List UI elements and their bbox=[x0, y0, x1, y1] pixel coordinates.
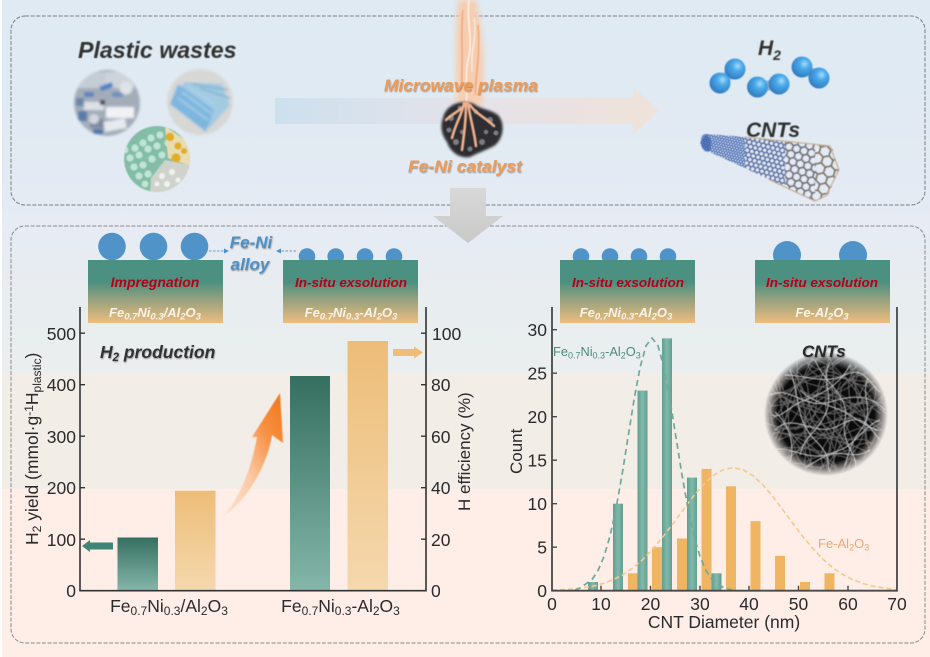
diagram: impregnation catalyst: /Al bbox=[163, 305, 181, 320]
left axis numbers: 300 bbox=[47, 427, 76, 447]
category label 2: 3 bbox=[393, 604, 400, 618]
category label 1: 3 bbox=[221, 604, 228, 618]
x axis numbers: 50 bbox=[789, 594, 808, 614]
y axis numbers: 10 bbox=[528, 494, 547, 514]
legend: Fe-Al2O3: Fe-Al bbox=[818, 536, 849, 551]
diagram: in-situ exsolution catalyst, left chart: -Al bbox=[359, 305, 377, 320]
right axis numbers: 40 bbox=[431, 478, 451, 498]
diagram: impregnation catalyst: 2 bbox=[179, 312, 186, 322]
arrow: left axis indicator bbox=[82, 540, 113, 552]
diagram: in-situ exsolution catalyst, left chart: 2 bbox=[376, 312, 383, 322]
left axis title: ) bbox=[22, 353, 42, 358]
icon: catalyst rock bbox=[441, 102, 503, 157]
legend: Fe0.7Ni0.3-Al2O3: 2 bbox=[621, 350, 626, 360]
green fit curve bbox=[575, 338, 732, 590]
label: Fe-Ni alloy: alloy bbox=[231, 255, 271, 274]
diagram: impregnation catalyst bbox=[88, 233, 223, 323]
left axis title: -1 bbox=[22, 405, 36, 416]
diagram: in-situ exsolution catalyst, right chart bbox=[560, 248, 695, 323]
arrow: improvement bbox=[220, 393, 283, 518]
diagram: in-situ exsolution catalyst, left chart: O bbox=[382, 305, 392, 320]
diagram: in-situ exsolution catalyst, left chart: 3 bbox=[392, 312, 398, 322]
legend: Fe0.7Ni0.3-Al2O3: 0.7 bbox=[568, 350, 580, 360]
right axis numbers: 20 bbox=[431, 530, 451, 550]
left axis title: H bbox=[22, 392, 42, 405]
icon: plastic bottles photo bbox=[74, 70, 140, 136]
diagram: in-situ exsolution catalyst, right chart: -Al bbox=[634, 305, 652, 320]
green bars bbox=[588, 338, 722, 591]
left axis numbers: 500 bbox=[47, 324, 76, 344]
legend: Fe-Al2O3: 2 bbox=[849, 542, 854, 552]
y axis numbers: 5 bbox=[537, 538, 547, 558]
category label 1: O bbox=[208, 596, 221, 616]
legend: Fe0.7Ni0.3-Al2O3: Ni bbox=[580, 344, 593, 359]
legend: Fe-Al2O3: O bbox=[854, 536, 864, 551]
left axis title: yield (mmol·g bbox=[22, 416, 42, 526]
x axis numbers: 60 bbox=[838, 594, 858, 614]
diagram: Fe-Al2O3 catalyst bbox=[755, 241, 890, 323]
y axis numbers: 30 bbox=[528, 320, 547, 340]
category label 2: -Al bbox=[351, 596, 373, 616]
y axis numbers: 20 bbox=[528, 407, 547, 427]
category label 2: Ni bbox=[318, 596, 335, 616]
category label 1: Fe bbox=[110, 596, 131, 616]
axes bbox=[552, 307, 897, 591]
legend: Fe-Al2O3: 3 bbox=[864, 542, 869, 552]
diagram: in-situ exsolution catalyst, left chart bbox=[283, 248, 418, 323]
left axis numbers bbox=[47, 324, 76, 601]
icon: carbon nanotube bbox=[700, 133, 839, 201]
diagram: Fe-Al2O3 catalyst: 2 bbox=[827, 312, 834, 322]
diagram: impregnation catalyst: Ni bbox=[137, 305, 151, 320]
x axis numbers bbox=[547, 594, 907, 614]
category label 1: /Al bbox=[180, 596, 201, 616]
y axis numbers: 25 bbox=[528, 364, 547, 384]
y axis numbers: 0 bbox=[537, 581, 547, 601]
diagram: in-situ exsolution catalyst, right chart: In-situ exsolution bbox=[572, 275, 684, 290]
diagram: Fe-Al2O3 catalyst: Fe-Al bbox=[795, 305, 828, 320]
x axis title: CNT Diameter (nm) bbox=[648, 612, 800, 632]
legend: Fe0.7Ni0.3-Al2O3: Fe bbox=[553, 344, 568, 359]
diagram: in-situ exsolution catalyst, left chart: 0.7 bbox=[320, 312, 334, 322]
label: Fe-Ni alloy bbox=[209, 233, 296, 274]
diagram: in-situ exsolution catalyst, right chart: Fe bbox=[580, 305, 595, 320]
left axis numbers: 0 bbox=[66, 581, 76, 601]
label: Fe-Ni alloy: Fe-Ni bbox=[230, 233, 274, 252]
left axis numbers: 200 bbox=[47, 478, 76, 498]
x axis numbers: 40 bbox=[739, 594, 759, 614]
right axis title: H efficiency (%) bbox=[455, 392, 474, 511]
left axis numbers: 400 bbox=[47, 375, 76, 395]
diagram: impregnation catalyst: 0.7 bbox=[124, 312, 138, 322]
y axis title: Count bbox=[507, 428, 526, 474]
diagram: impregnation catalyst: O bbox=[186, 305, 196, 320]
orange bars bbox=[628, 469, 834, 591]
heading: H2: 2 bbox=[772, 47, 781, 63]
left axis title: plastic bbox=[30, 358, 44, 392]
diagram: in-situ exsolution catalyst, left chart: In-situ exsolution bbox=[295, 275, 407, 290]
ticks bbox=[80, 333, 426, 539]
diagram: impregnation catalyst: 0.3 bbox=[150, 312, 164, 322]
right axis numbers: 60 bbox=[431, 427, 451, 447]
category label 1: 0.7 bbox=[131, 604, 148, 618]
ticks bbox=[552, 330, 848, 591]
diagram: in-situ exsolution catalyst, left chart: 0.3 bbox=[346, 312, 360, 322]
label: Fe-Ni catalyst: Fe-Ni catalyst bbox=[408, 158, 524, 176]
y axis numbers: 15 bbox=[528, 450, 547, 470]
panel: results bbox=[11, 226, 925, 643]
y axis numbers bbox=[528, 320, 547, 601]
category label 2: 0.3 bbox=[335, 604, 352, 618]
diagram: in-situ exsolution catalyst, right chart: 2 bbox=[651, 312, 658, 322]
x axis numbers: 0 bbox=[547, 594, 557, 614]
icon: plastic pellets photo bbox=[122, 126, 192, 195]
diagram: impregnation catalyst: Fe bbox=[109, 305, 124, 320]
panel: process overview bbox=[11, 16, 925, 205]
label: microwave plasma: Microwave plasma bbox=[384, 77, 538, 95]
legend: Fe0.7Ni0.3-Al2O3: 3 bbox=[636, 350, 641, 360]
legend: Fe0.7Ni0.3-Al2O3: O bbox=[626, 344, 636, 359]
left axis title: H bbox=[22, 532, 42, 545]
icon: face masks photo bbox=[167, 69, 233, 135]
image: CNT micrograph bbox=[764, 352, 888, 476]
category label 2: O bbox=[380, 596, 393, 616]
histogram: CNT diameter bbox=[507, 307, 907, 632]
right axis numbers bbox=[431, 324, 461, 601]
heading: H2 production: H bbox=[100, 342, 113, 362]
x axis numbers: 70 bbox=[887, 594, 907, 614]
diagram: in-situ exsolution catalyst, right chart: 0.7 bbox=[595, 312, 609, 322]
diagram: impregnation catalyst: 3 bbox=[196, 312, 202, 322]
right axis numbers: 100 bbox=[432, 324, 461, 344]
category label 2: 0.7 bbox=[302, 604, 319, 618]
right axis numbers: 0 bbox=[431, 581, 441, 601]
left axis numbers: 100 bbox=[47, 530, 76, 550]
legend: Fe0.7Ni0.3-Al2O3: -Al bbox=[605, 344, 621, 359]
arrow: right axis indicator bbox=[393, 346, 423, 358]
diagram: impregnation catalyst: Impregnation bbox=[111, 274, 199, 290]
x axis numbers: 20 bbox=[641, 594, 660, 614]
icon: hydrogen molecules bbox=[710, 56, 830, 98]
heading: plastic wastes: Plastic wastes bbox=[78, 37, 237, 63]
x axis numbers: 10 bbox=[591, 594, 611, 614]
bar chart: H2 production bbox=[22, 307, 474, 618]
right axis numbers: 80 bbox=[431, 375, 451, 395]
x axis numbers: 30 bbox=[690, 594, 710, 614]
label: CNTs micrograph: CNTs bbox=[802, 342, 846, 361]
diagram: Fe-Al2O3 catalyst: O bbox=[833, 305, 843, 320]
diagram: Fe-Al2O3 catalyst: In-situ exsolution bbox=[766, 275, 878, 290]
heading: H2 production: 2 bbox=[112, 352, 120, 364]
diagram: in-situ exsolution catalyst, right chart: 3 bbox=[667, 312, 673, 322]
diagram: in-situ exsolution catalyst, right chart: Ni bbox=[608, 305, 621, 320]
diagram: Fe-Al2O3 catalyst: 3 bbox=[843, 312, 849, 322]
category label 2: 2 bbox=[373, 604, 380, 618]
legend: Fe0.7Ni0.3-Al2O3: 0.3 bbox=[593, 350, 605, 360]
left axis title: 2 bbox=[30, 525, 44, 532]
category label 1: 2 bbox=[201, 604, 208, 618]
heading: H2 production: production bbox=[119, 342, 215, 362]
heading: CNTs: CNTs bbox=[746, 119, 800, 142]
icon: microwave plasma bbox=[456, 0, 484, 105]
diagram: in-situ exsolution catalyst, right chart: O bbox=[657, 305, 667, 320]
arrow: process arrow bbox=[275, 86, 659, 135]
diagram: in-situ exsolution catalyst, left chart: Ni bbox=[333, 305, 346, 320]
orange fit curve bbox=[552, 468, 897, 590]
diagram: in-situ exsolution catalyst, right chart: 0.3 bbox=[621, 312, 635, 322]
heading: H2: H bbox=[758, 37, 773, 60]
diagram: in-situ exsolution catalyst, left chart: Fe bbox=[305, 305, 320, 320]
bars bbox=[118, 341, 388, 591]
category label 1: Ni bbox=[147, 596, 164, 616]
category label 1: 0.3 bbox=[164, 604, 181, 618]
arrow: down arrow bbox=[433, 188, 503, 243]
category label 2: Fe bbox=[281, 596, 302, 616]
axes bbox=[80, 307, 426, 591]
